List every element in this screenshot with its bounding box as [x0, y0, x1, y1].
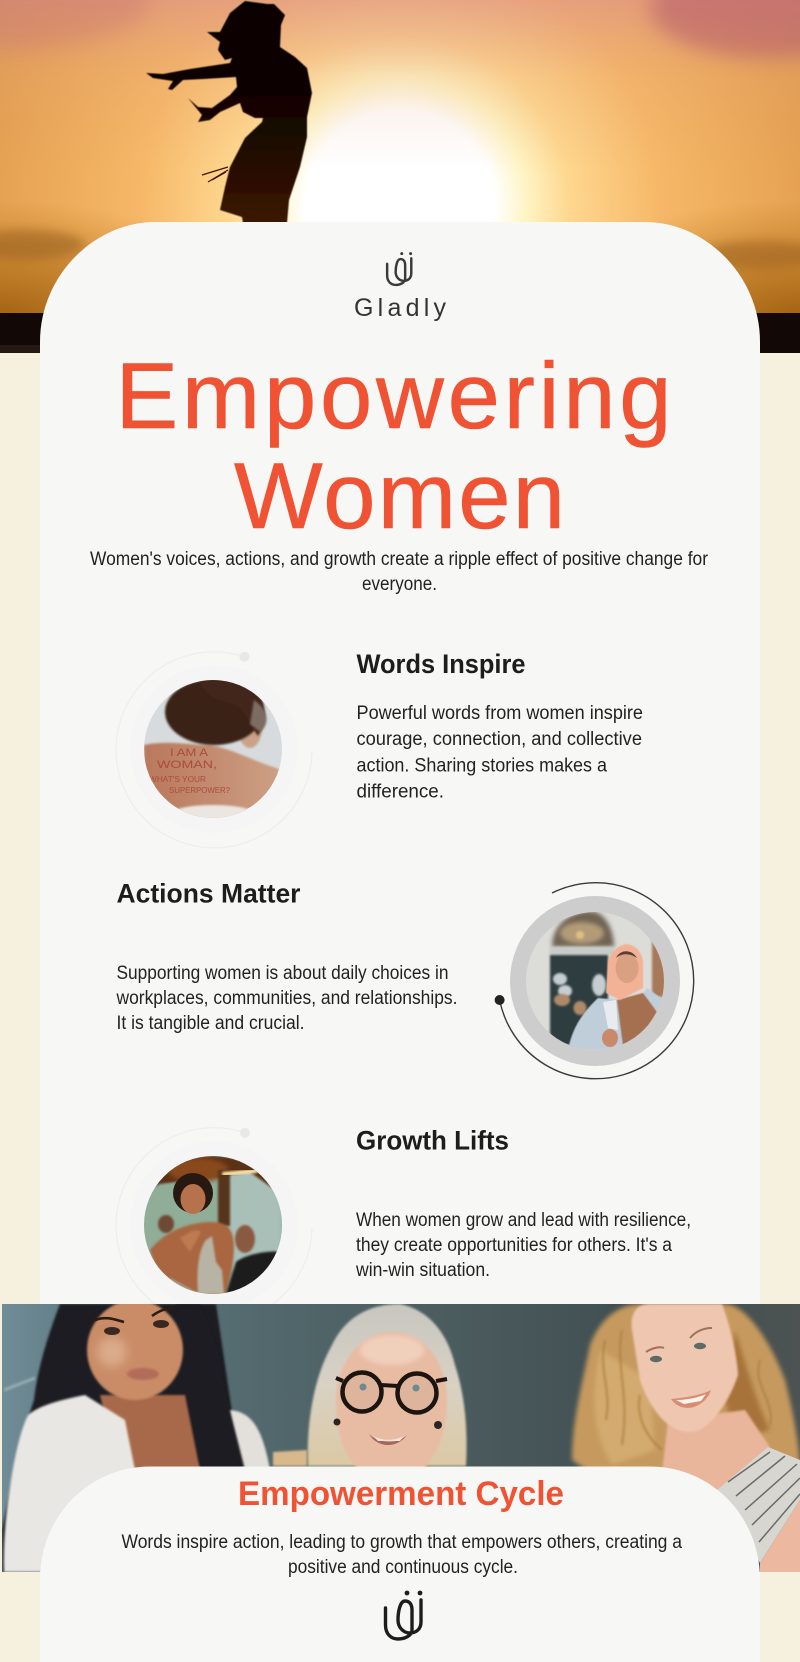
body text: It is tangible and crucial. [116, 1013, 304, 1034]
subtitle [90, 549, 709, 595]
body text [116, 963, 458, 1034]
photo: woman in headscarf [526, 911, 666, 1050]
icon: Gladly mark [387, 252, 412, 285]
closing card [40, 1466, 760, 1662]
closing text: Words inspire action, leading to growth that empowers others, creating a [122, 1532, 682, 1553]
body text: courage, connection, and collective [356, 729, 642, 750]
orbit ring with dot [495, 883, 694, 1079]
body text [355, 1210, 691, 1281]
woman 2 [273, 1304, 467, 1470]
woman 3 [572, 1304, 800, 1572]
photo: woman with words on her back: I AM A [170, 747, 209, 759]
closing text: positive and continuous cycle. [288, 1557, 518, 1578]
footer logo icon [386, 1591, 422, 1639]
title: Women [234, 443, 565, 548]
title [116, 343, 672, 548]
orbit ring with dot [116, 652, 312, 848]
panel: Actions Matter [116, 878, 694, 1079]
heading: Growth Lifts [356, 1126, 509, 1156]
subtitle: Women's voices, actions, and growth create a ripple effect of positive change for [90, 549, 709, 570]
heading: Actions Matter [116, 878, 301, 908]
body text: difference. [356, 782, 444, 802]
body text: win-win situation. [355, 1260, 490, 1281]
heading: Words Inspire [356, 649, 526, 679]
closing heading: Empowerment Cycle [238, 1475, 564, 1513]
photo: woman with words on her back [144, 679, 282, 823]
body text: action. Sharing stories makes a [356, 756, 607, 776]
photo: woman with words on her back: WOMAN, [157, 759, 217, 771]
title: Empowering [116, 343, 672, 448]
photo: woman with hand on heart [144, 1156, 282, 1294]
panel: Growth Lifts [116, 1127, 690, 1304]
wordmark: Gladly [354, 294, 446, 322]
body text [356, 703, 643, 802]
body text: Supporting women is about daily choices in [116, 963, 448, 984]
body text: workplaces, communities, and relationships. [116, 988, 458, 1009]
orbit ring with dot [116, 1128, 312, 1324]
hero photo: woman silhouette at sunset [0, 0, 800, 353]
photo: woman with words on her back: WHAT'S YOUR [149, 775, 206, 784]
photo: woman with words on her back: SUPERPOWER? [169, 786, 231, 795]
Gladly logo [354, 252, 446, 322]
body text: Powerful words from women inspire [356, 703, 643, 724]
body text: When women grow and lead with resilience, [356, 1210, 691, 1231]
photo banner: three women [2, 1300, 800, 1572]
body text: they create opportunities for others. It's a [356, 1235, 672, 1256]
main content card [40, 222, 760, 1310]
closing text [122, 1532, 682, 1578]
panel: Words Inspire [116, 649, 643, 848]
woman 1 [2, 1300, 270, 1572]
subtitle: everyone. [362, 574, 437, 595]
